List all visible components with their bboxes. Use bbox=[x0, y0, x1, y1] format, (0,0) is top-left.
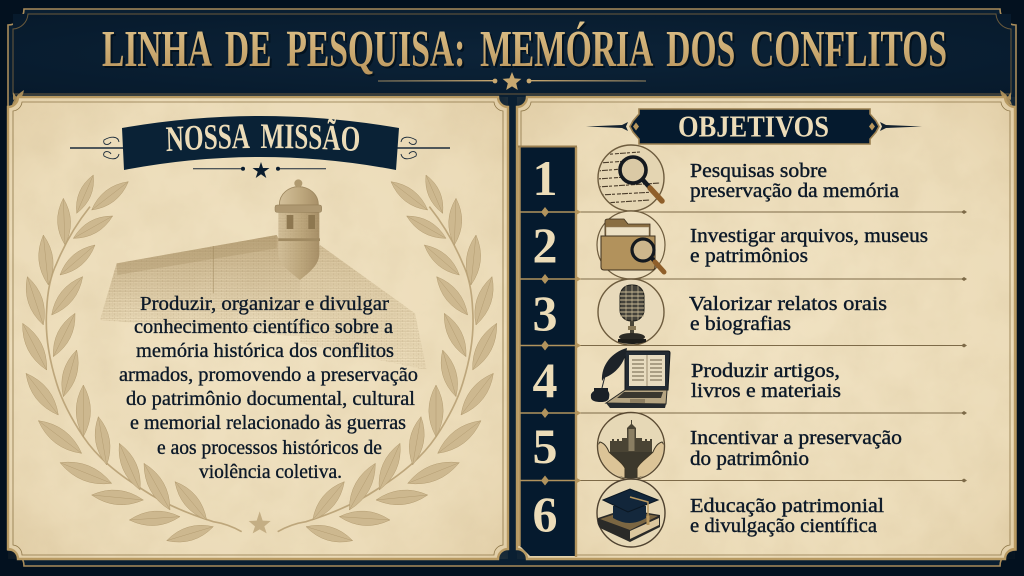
icon: graduation cap and book bbox=[597, 479, 665, 547]
number 2: 2 bbox=[532, 217, 558, 273]
ribbon flourishes bbox=[70, 137, 450, 159]
objetivo 2 text: Investigar arquivos, museus bbox=[690, 225, 928, 247]
objetivo 6 text bbox=[690, 495, 884, 537]
mission text: e aos processos históricos de bbox=[157, 437, 382, 459]
objetivo 5 text: Incentivar a preservação bbox=[690, 427, 902, 449]
plaque diamonds bbox=[633, 122, 875, 130]
objetivos heading bbox=[586, 108, 922, 144]
objetivo 2 text bbox=[690, 225, 928, 267]
number 6: 6 bbox=[532, 486, 558, 542]
icon: laptop, quill and inkwell bbox=[591, 348, 670, 408]
heading text: NOSSA MISSÃO bbox=[166, 119, 360, 152]
row dividers bbox=[519, 207, 967, 486]
star divider bbox=[193, 162, 326, 178]
heading plaque bbox=[630, 109, 879, 144]
ribbon banner bbox=[122, 116, 399, 170]
objetivo 2 text: e patrimônios bbox=[690, 245, 808, 267]
icon: folder and magnifier bbox=[597, 211, 665, 279]
number 1: 1 bbox=[532, 150, 558, 206]
mission text bbox=[119, 293, 418, 483]
mission text: memória histórica dos conflitos bbox=[136, 340, 394, 362]
heading arrows bbox=[586, 122, 922, 131]
objetivo 5 text: do patrimônio bbox=[690, 448, 809, 470]
icon: document and magnifier bbox=[597, 145, 664, 211]
number 4: 4 bbox=[532, 352, 558, 408]
mission text: conhecimento científico sobre a bbox=[134, 316, 393, 338]
objetivo 4 text: livros e materiais bbox=[691, 380, 841, 402]
corner laurel right bbox=[1000, 90, 1012, 105]
objetivo 4 text: Produzir artigos, bbox=[691, 360, 840, 382]
mission text: armados, promovendo a preservação bbox=[119, 364, 418, 386]
objetivo 3 text bbox=[689, 293, 887, 335]
mission text: do patrimônio documental, cultural bbox=[126, 388, 415, 410]
mission text: violência coletiva. bbox=[199, 461, 342, 483]
panel: nossa missão bbox=[6, 96, 510, 560]
objetivo 1 text: Pesquisas sobre bbox=[690, 160, 827, 182]
title ornament bbox=[378, 72, 646, 90]
number 5: 5 bbox=[532, 418, 558, 474]
wreath star bbox=[249, 511, 271, 533]
right branch bbox=[278, 175, 497, 542]
objetivo 3 text: e biografias bbox=[690, 313, 791, 335]
objetivo 3 text: Valorizar relatos orais bbox=[689, 293, 887, 315]
objetivo 5 text bbox=[690, 427, 902, 470]
number 3: 3 bbox=[532, 285, 558, 341]
objetivo 6 text: e divulgação científica bbox=[690, 515, 877, 537]
ribbon heading bbox=[70, 116, 450, 178]
icon: microphone bbox=[598, 279, 664, 345]
objetivo 4 text bbox=[691, 360, 841, 402]
corner laurel left bbox=[12, 90, 24, 105]
laurel wreath bbox=[23, 175, 497, 542]
objetivo 6 text: Educação patrimonial bbox=[690, 495, 884, 517]
objetivo 1 text bbox=[690, 160, 899, 202]
mission text: e memorial relacionado às guerras bbox=[130, 412, 406, 434]
icon: fortress in hands bbox=[597, 412, 665, 480]
number column bbox=[518, 146, 577, 557]
left branch bbox=[23, 175, 242, 542]
fort illustration bbox=[100, 179, 427, 370]
mission text: Produzir, organizar e divulgar bbox=[140, 293, 389, 315]
objetivo 1 text: preservação da memória bbox=[690, 180, 899, 202]
panel: objetivos bbox=[517, 97, 1015, 559]
heading text: OBJETIVOS bbox=[678, 108, 829, 144]
